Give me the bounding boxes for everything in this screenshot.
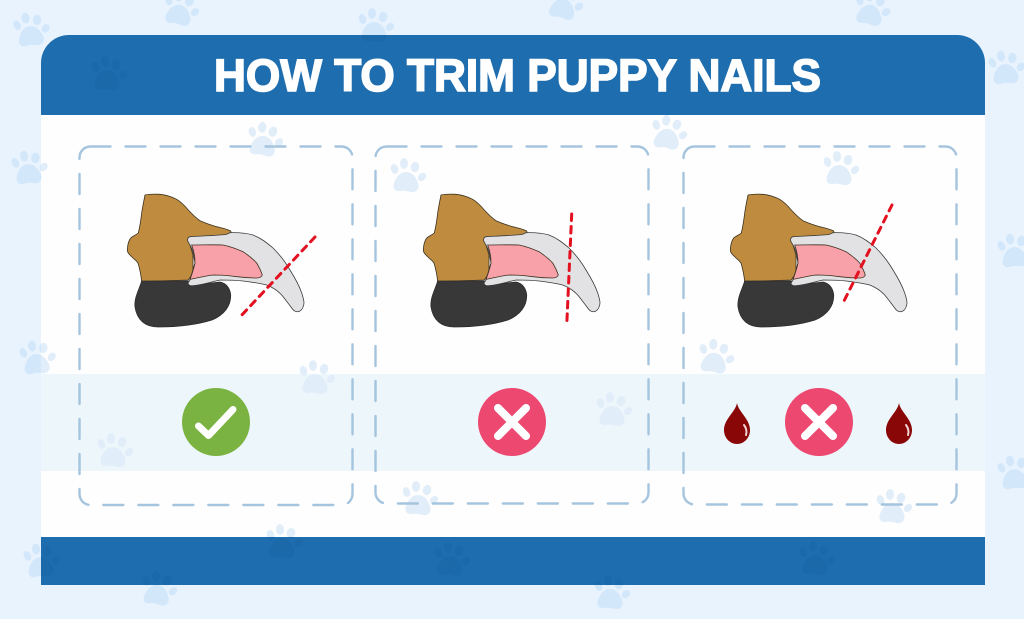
cut line: correct [240, 237, 315, 317]
main white panel [41, 115, 985, 537]
dashed frame: too long cut [376, 146, 648, 504]
title: HOW TO TRIM PUPPY NAILS [214, 50, 821, 101]
icon: green check [182, 388, 250, 456]
icon: blood drop left [724, 403, 750, 444]
cut line: too short [842, 205, 892, 305]
dashed frame: correct cut [80, 146, 352, 505]
nail illustration: correct cut [127, 194, 304, 327]
panel: too long cut [376, 146, 648, 504]
icon: red cross [478, 388, 546, 456]
footer bar [41, 537, 985, 585]
dashed frame: too short cut [684, 146, 956, 504]
panel: too short cut [684, 146, 956, 504]
faint paws on the panel [41, 115, 912, 537]
pale band behind status icons [41, 374, 985, 471]
cut line: too long [567, 214, 572, 326]
nail illustration: too short cut [730, 194, 907, 327]
nail illustration: too long cut [423, 194, 600, 327]
header bar [41, 35, 985, 115]
icon: red cross [785, 388, 853, 456]
icon: blood drop right [886, 403, 912, 444]
panel: correct cut [80, 146, 352, 505]
faint paws on the bars [127, 146, 912, 504]
